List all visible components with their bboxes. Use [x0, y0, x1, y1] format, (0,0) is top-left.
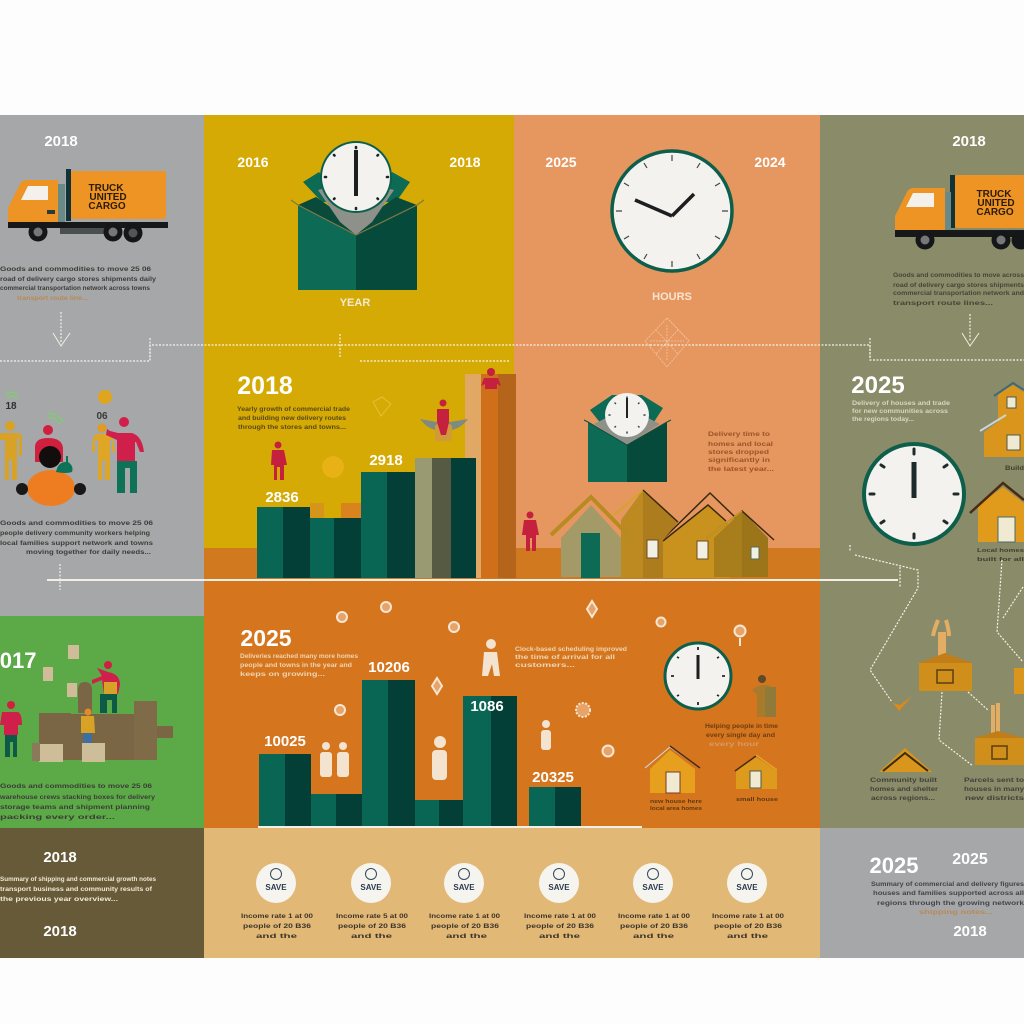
text block: bottom right description: houses and families supported across all: [873, 890, 1024, 897]
icon: parcel house 2: [975, 703, 1024, 765]
icon: small envelope clock: [584, 393, 671, 482]
panel: truck column grey: [0, 115, 204, 616]
text block: people description: local families support network and towns: [0, 540, 153, 547]
panel: green workers: [0, 616, 204, 828]
panel: peach centre: [514, 115, 820, 548]
badge 6: Income rate 1 at 00: [712, 913, 784, 920]
icon: right clock: [864, 444, 964, 544]
text block: olive description: for new communities across: [852, 408, 948, 415]
text block: right truck description: road of delivery cargo stores shipments: [893, 282, 1024, 289]
year labels: peach top: 2024: [754, 154, 786, 170]
badge 3: people of 20 B36: [431, 923, 500, 930]
icon: people group: 06: [96, 411, 108, 422]
text block: parcel caption: [964, 777, 1024, 802]
text block: orange left description: [240, 653, 358, 678]
icon: orange section clock: [665, 643, 731, 709]
badge 1: [241, 863, 313, 940]
icon: delivery truck right: TRUCK: [976, 189, 1012, 200]
badge 3: [429, 863, 500, 940]
icon: row of houses: [551, 490, 774, 578]
text block: house captions: local area homes: [650, 806, 702, 812]
bar labels: orange chart: 20325: [532, 769, 574, 786]
icon: orange section houses: [645, 746, 777, 793]
text block: bottom right description: [871, 881, 1024, 916]
year labels: yellow top: 2018: [449, 154, 481, 170]
text block: bottom right description: shipping notes...: [919, 909, 993, 916]
text block: figure caption: every hour: [709, 741, 760, 748]
text block: parcel caption: houses in many: [964, 786, 1024, 793]
text block: truck description: Goods and commodities to move 25 06: [0, 266, 151, 273]
text block: orange middle description: [515, 646, 627, 669]
text block: brown description: the previous year overview...: [0, 896, 118, 903]
text block: peach description: significantly in: [708, 457, 770, 464]
icon: workers and boxes: [0, 645, 173, 762]
badge 3: Income rate 1 at 00: [429, 913, 500, 920]
year label: right top: 2018: [952, 133, 986, 150]
bar labels: orange chart: 10025: [264, 733, 306, 750]
badge 5: SAVE: [642, 883, 664, 892]
panel: grey bottom right: [820, 828, 1024, 958]
text block: orange left description: Deliveries reached many more homes: [240, 653, 358, 660]
arrow: left column down: [53, 312, 70, 346]
panel: orange chart: [204, 580, 820, 828]
badge 2: SAVE: [360, 883, 382, 892]
decorative faint marker: [373, 397, 391, 416]
badge 4: SAVE: [548, 883, 570, 892]
text block: olive description: the regions today...: [852, 416, 914, 423]
icon: dotted diamond: [645, 318, 689, 367]
badge 2: people of 20 B36: [338, 923, 407, 930]
text block: house captions: [650, 797, 778, 812]
text block: peach description: stores dropped: [708, 449, 769, 456]
text block: right truck description: [893, 272, 1024, 307]
icon: large clock: [612, 151, 732, 271]
badge 3: and the: [446, 933, 488, 940]
text block: peach description: the latest year...: [708, 466, 774, 473]
text block: peach description: [708, 431, 774, 473]
icon: edge house: [1014, 668, 1024, 694]
text block: yellow description: Yearly growth of commercial trade: [237, 406, 350, 413]
text block: olive description: [852, 400, 950, 423]
icon: delivery truck left: CARGO: [88, 201, 126, 212]
bar chart: yellow: [257, 374, 516, 578]
badge 5: Income rate 1 at 00: [618, 913, 690, 920]
text block: bottom right description: regions through the growing network: [877, 900, 1024, 907]
panel: olive right: [820, 115, 1024, 828]
decorative chart sun: [322, 456, 344, 478]
text block: right truck description: commercial transportation network and: [893, 290, 1024, 297]
bar labels: orange chart: 10206: [368, 659, 410, 676]
year label: 2025 right: 2025: [851, 372, 905, 399]
text block: bottom right description: Summary of commercial and delivery figures: [871, 881, 1024, 888]
text block: house caption lower: Local homes: [977, 548, 1024, 554]
text block: house caption upper: Build: [1005, 465, 1024, 472]
text block: yellow description: [237, 406, 350, 431]
year label: bottom right lower: 2018: [953, 923, 987, 940]
year labels: bottom right: 2025: [870, 853, 918, 878]
badge 3: SAVE: [453, 883, 475, 892]
stat row: six badges: [241, 863, 784, 940]
badge 4: Income rate 1 at 00: [524, 913, 596, 920]
arrow: right column down: [962, 314, 979, 346]
text block: truck description: transport route line...: [17, 295, 88, 302]
label: hours: HOURS: [652, 291, 692, 303]
text block: roof caption: [870, 777, 939, 802]
badge 1: people of 20 B36: [243, 923, 312, 930]
icon: people group: 18: [5, 401, 17, 412]
text block: brown description: transport business and community results of: [0, 886, 153, 893]
icon: delivery truck right: [895, 175, 1024, 250]
badge 4: people of 20 B36: [526, 923, 595, 930]
text block: people description: moving together for daily needs...: [26, 549, 151, 556]
text block: parcel caption: Parcels sent to: [964, 777, 1024, 784]
icon: clock in envelope: [291, 141, 424, 290]
icon: delivery truck left: UNITED: [89, 192, 127, 203]
year label: left top: 2018: [44, 133, 78, 150]
text block: yellow description: through the stores and towns...: [238, 424, 346, 431]
text block: green description: [0, 783, 155, 821]
badge 1: and the: [256, 933, 298, 940]
text block: peach description: Delivery time to: [708, 431, 770, 438]
badge 5: and the: [633, 933, 675, 940]
bar labels: orange chart: [264, 659, 574, 786]
text block: orange middle description: the time of arrival for all: [515, 654, 615, 661]
text block: people description: [0, 520, 153, 556]
year labels: peach top: 2025: [545, 154, 577, 170]
text block: truck description: commercial transportation network across towns: [0, 285, 150, 292]
text block: brown description: Summary of shipping and commercial growth notes: [0, 876, 156, 883]
text block: figure caption: [705, 723, 779, 748]
badge 1: SAVE: [265, 883, 287, 892]
dotted connectors right: [939, 560, 1023, 766]
badge 2: and the: [351, 933, 393, 940]
text block: figure caption: Helping people in time: [705, 723, 779, 730]
bar labels: yellow chart: 2836: [265, 489, 299, 506]
label: year: YEAR: [340, 297, 370, 309]
badge 2: [336, 863, 408, 940]
icon: red figure on bar: [271, 442, 287, 480]
text block: green description: packing every order...: [0, 814, 115, 821]
text block: house caption lower: [977, 548, 1024, 563]
icon: parcel house: [919, 620, 972, 691]
icon: people group: [0, 390, 144, 506]
badge 6: people of 20 B36: [714, 923, 783, 930]
text block: orange middle description: Clock-based scheduling improved: [515, 646, 627, 653]
year label: brown top: 2018: [43, 849, 77, 866]
text block: people description: Goods and commodities to move 25 06: [0, 520, 153, 527]
badge 4: and the: [539, 933, 581, 940]
icon: figure beside clock: [752, 675, 776, 717]
text block: roof caption: Community built: [870, 777, 938, 784]
text block: right truck description: Goods and commodities to move across: [893, 272, 1024, 279]
badge 5: [618, 863, 690, 940]
icon: orange arrowhead: [893, 696, 912, 711]
badge 5: people of 20 B36: [620, 923, 689, 930]
text block: house caption lower: built for all: [977, 557, 1024, 563]
text block: truck description: road of delivery cargo stores shipments daily: [0, 276, 156, 283]
badge 6: and the: [727, 933, 769, 940]
text block: peach description: homes and local: [708, 441, 773, 448]
year labels: peach top: [545, 154, 786, 170]
year labels: yellow top: 2016: [237, 154, 269, 170]
text block: green description: warehouse crews stacking boxes for delivery: [0, 794, 155, 801]
text block: people description: people delivery community workers helping: [0, 530, 150, 537]
bar labels: yellow chart: 2918: [369, 452, 403, 469]
text block: orange left description: keeps on growing...: [240, 671, 325, 678]
icons: floating markers: [335, 601, 746, 756]
text block: orange left description: people and towns in the year and: [240, 662, 352, 669]
bar chart: orange: [258, 680, 642, 828]
text block: roof caption: across regions...: [871, 795, 935, 802]
text block: truck description: [0, 266, 156, 302]
bar labels: yellow chart: [265, 452, 403, 506]
text block: olive description: Delivery of houses and trade: [852, 400, 950, 407]
text block: green description: Goods and commodities to move 25 06: [0, 783, 152, 790]
text block: house captions: new house here: [650, 799, 702, 805]
badge 6: [712, 863, 784, 940]
icon: delivery truck left: TRUCK: [88, 183, 124, 194]
year labels: yellow top: [237, 154, 481, 170]
icon: red figure by houses: [522, 512, 539, 551]
badge 2: Income rate 5 at 00: [336, 913, 408, 920]
panel: brown note: [0, 828, 204, 958]
year labels: bottom right: [870, 851, 988, 878]
badge 1: Income rate 1 at 00: [241, 913, 313, 920]
year label: 2018 heading: 2018: [237, 372, 293, 400]
text block: parcel caption: new districts: [965, 795, 1024, 802]
icon: delivery truck right: CARGO: [976, 207, 1014, 218]
text block: figure caption: every single day and: [706, 732, 775, 739]
text block: green description: storage teams and shipment planning: [0, 804, 150, 811]
text block: house captions: small house: [736, 797, 778, 803]
year label: 2025 orange: 2025: [240, 625, 292, 651]
solid timeline: [47, 545, 918, 702]
icon: roof triangle: [879, 748, 932, 772]
text block: orange middle description: customers...: [515, 662, 575, 669]
panel: yellow centre: [204, 115, 514, 548]
icon: delivery truck left: [8, 169, 168, 242]
text block: right truck description: transport route lines...: [893, 300, 993, 307]
text block: brown description: [0, 876, 156, 903]
icon: red figure on top: [481, 368, 501, 389]
icons: small people figures: [320, 639, 551, 780]
text block: yellow description: and building new delivery routes: [238, 415, 346, 422]
panel: tan icons: [204, 828, 820, 958]
year labels: bottom right: 2025: [952, 851, 988, 868]
icon: delivery truck right: UNITED: [977, 198, 1015, 209]
icon: winged red figure: [420, 400, 468, 441]
badge 4: [524, 863, 596, 940]
badge 6: SAVE: [736, 883, 758, 892]
text block: roof caption: homes and shelter: [870, 786, 939, 793]
bar labels: orange chart: 1086: [470, 698, 504, 715]
panel: ground strip: [204, 548, 820, 580]
year label: brown bottom: 2018: [43, 923, 77, 940]
dotted timeline: [0, 334, 1024, 361]
icon: right houses upper: [970, 383, 1024, 542]
